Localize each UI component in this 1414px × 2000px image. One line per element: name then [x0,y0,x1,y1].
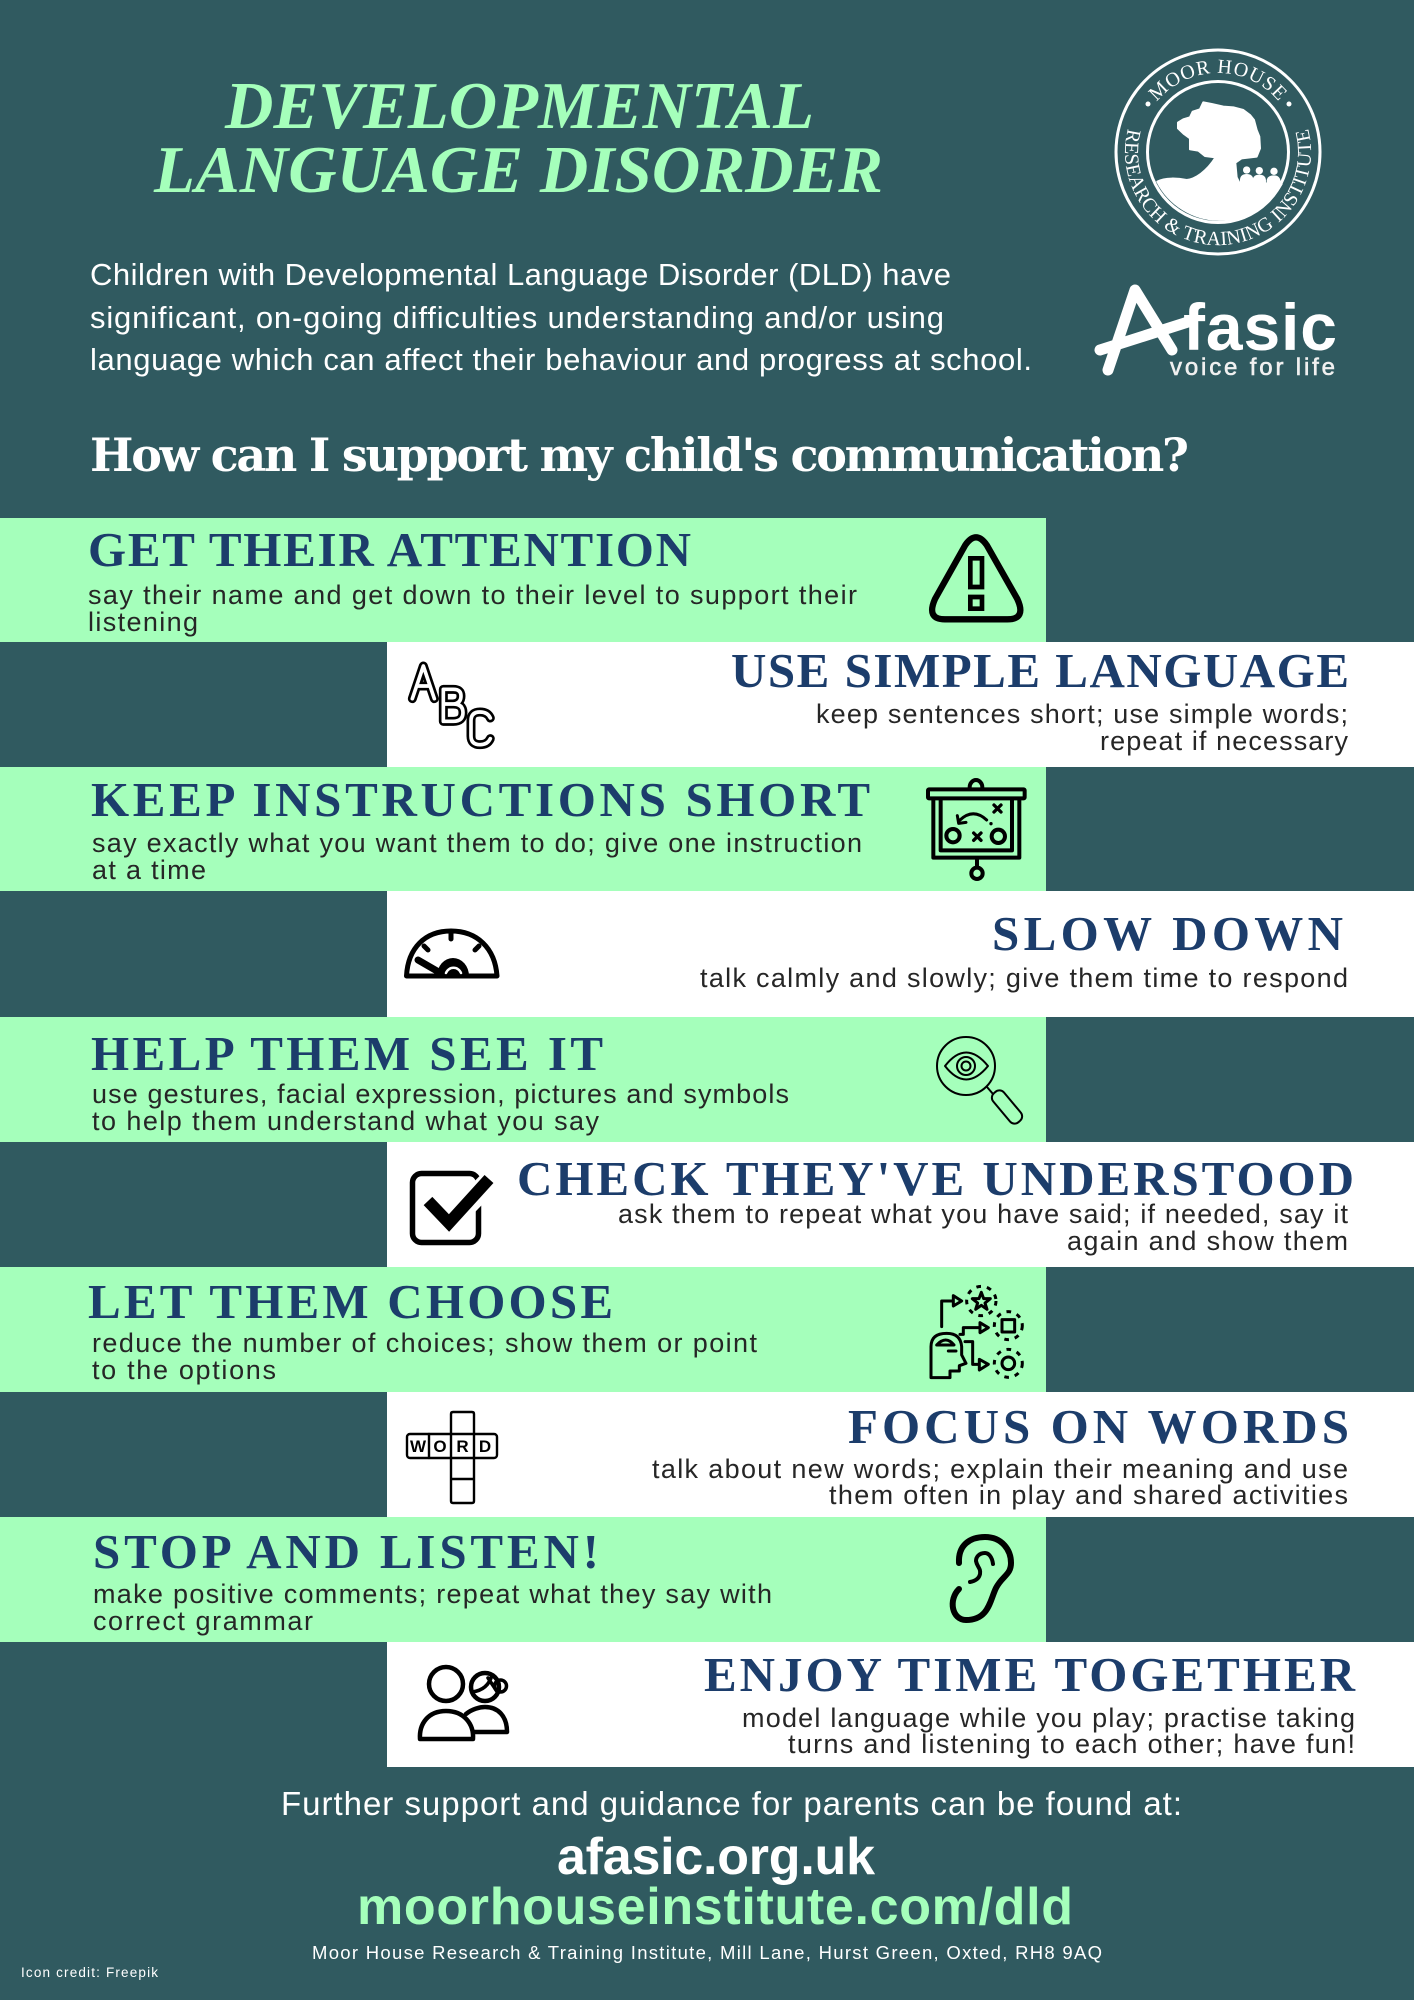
intro text [90,257,1032,377]
panel: slow down: talk calmly and slowly; give them time to respond [700,963,1348,993]
title [153,69,883,207]
panel: enjoy time together [387,1642,1414,1767]
panel: help them see it [0,1017,1046,1142]
title: DEVELOPMENTAL [224,69,814,143]
panel: focus on words [387,1392,1414,1517]
icon: checkbox [412,1174,491,1242]
panel: focus on words: talk about new words; explain their meaning and use [652,1454,1348,1484]
panel: enjoy time together: turns and listening to each other; have fun! [788,1729,1355,1759]
panel: keep instructions short [0,767,1046,891]
panel: let them choose: to the options [92,1355,276,1385]
logo: Afasic voice for life: voice for life [1170,354,1335,381]
intro text: language which can affect their behaviour and progress at school. [90,342,1032,377]
panel: get their attention: listening [88,607,198,637]
logo: Moor House Research and Training Institute: MOOR HOUSE [1148,60,1287,102]
heading: how can I support: How can I support my child's communication? [90,428,1189,482]
intro text: significant, on-going difficulties understanding and/or using [90,300,944,335]
panel: get their attention: say their name and get down to their level to support their [88,580,857,610]
panel: use simple language: USE SIMPLE LANGUAGE [731,643,1349,698]
icon: ABC letters [412,666,490,745]
panel: enjoy time together: model language while you play; practise taking [742,1703,1355,1733]
icon: crossword word [407,1412,497,1503]
panel: stop and listen: correct grammar [93,1606,313,1636]
icon: crossword word: D [479,1437,491,1456]
footer: moor house link: moorhouseinstitute.com/dld [357,1878,1073,1936]
title: LANGUAGE DISORDER [153,133,883,207]
icon: parent and child [420,1667,507,1739]
logo: Afasic voice for life [1100,290,1337,381]
panel: stop and listen: STOP AND LISTEN! [93,1524,599,1579]
icon: warning triangle [932,537,1020,619]
panel: get their attention: GET THEIR ATTENTION [88,522,691,577]
panel: check they've understood: again and show them [1067,1226,1348,1256]
panel: let them choose [0,1267,1046,1392]
panel: keep instructions short: at a time [92,855,206,885]
panel: focus on words: them often in play and shared activities [829,1480,1348,1510]
panel: use simple language [387,642,1414,767]
icon: choices from head [931,1286,1022,1378]
icon: speedometer [406,931,497,976]
panel: let them choose: reduce the number of choices; show them or point [92,1328,757,1358]
panel: slow down [387,891,1414,1017]
panel: let them choose: LET THEM CHOOSE [88,1274,613,1329]
footer: afasic link: afasic.org.uk [557,1828,875,1886]
panel: get their attention [0,518,1046,642]
panel: slow down: SLOW DOWN [992,906,1343,961]
logo: Afasic voice for life: fasic [1183,290,1337,364]
logo: Moor House Research and Training Institute: RESEARCH & TRAINING INSTITUTE [1124,129,1312,246]
logo: Moor House Research and Training Institute [1114,48,1322,256]
footer: icon credit: Icon credit: Freepik [21,1965,158,1980]
panel: help them see it: to help them understand what you say [92,1106,600,1136]
panel: check they've understood [387,1142,1414,1267]
panel: help them see it: HELP THEM SEE IT [91,1026,603,1081]
icon: ear [953,1537,1011,1620]
icon: magnifying eye [937,1037,1025,1126]
panel: stop and listen: make positive comments; repeat what they say with [93,1579,772,1609]
panel: keep instructions short: KEEP INSTRUCTIONS SHORT [91,772,870,827]
panel: help them see it: use gestures, facial expression, pictures and symbols [92,1079,789,1109]
panel: check they've understood: ask them to repeat what you have said; if needed, say it [618,1199,1348,1229]
panel: check they've understood: CHECK THEY'VE UNDERSTOOD [517,1151,1354,1206]
panel: focus on words: FOCUS ON WORDS [848,1399,1349,1454]
icon: presentation board [928,780,1025,879]
footer: address: Moor House Research & Training Institute, Mill Lane, Hurst Green, Oxted, RH8 9AQ [312,1942,1102,1963]
footer: further support line: Further support and guidance for parents can be found at: [281,1785,1182,1822]
icon: crossword word: R [456,1437,469,1456]
icon: crossword word: W [410,1437,427,1456]
panel: use simple language: keep sentences short; use simple words; [816,699,1348,729]
panel: enjoy time together: ENJOY TIME TOGETHER [704,1647,1356,1702]
intro text: Children with Developmental Language Disorder (DLD) have [90,257,951,292]
icon: crossword word: O [433,1437,447,1456]
panel: use simple language: repeat if necessary [1100,726,1348,756]
panel: keep instructions short: say exactly what you want them to do; give one instruction [92,828,862,858]
panel: stop and listen [0,1517,1046,1642]
